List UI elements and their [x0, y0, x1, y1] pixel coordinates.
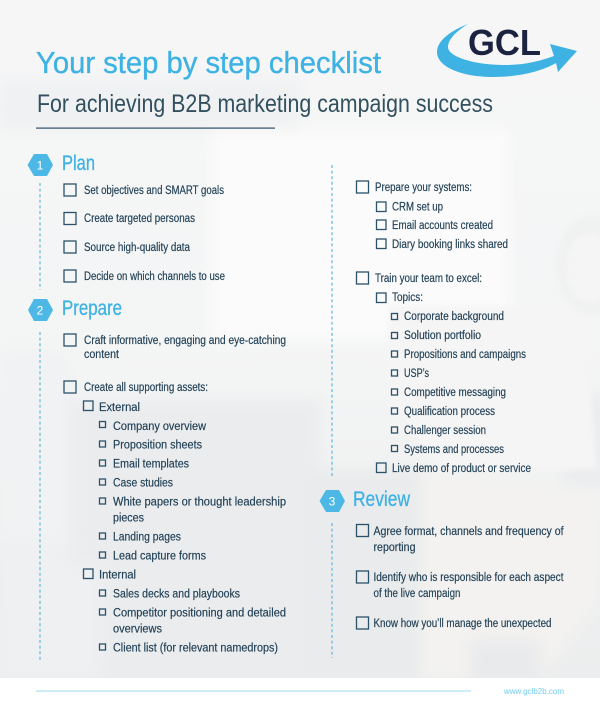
footer [0, 678, 600, 714]
heading: Review: Review [353, 488, 411, 511]
checklist: Review items: Know how you’ll manage the unexpected [374, 618, 552, 630]
checklist: systems and training: Propositions and campaigns [404, 349, 526, 361]
checklist: Prepare items: Case studies [113, 478, 173, 490]
checklist: Prepare items: pieces [113, 512, 144, 524]
heading: Prepare: Prepare [62, 297, 122, 320]
checklist: Prepare items: Proposition sheets [113, 440, 202, 452]
icon: hexagon 3 [320, 490, 345, 512]
checklist: Prepare items: Competitor positioning and detailed [113, 608, 286, 620]
footer url: www.gclb2b.com [503, 687, 564, 696]
icon: hexagon 2: 2 [37, 304, 44, 318]
checklist: Plan items: Set objectives and SMART goals [84, 185, 224, 197]
timeline: left column [39, 183, 41, 662]
heading: Plan: Plan [62, 152, 95, 175]
checklist: systems and training: Challenger session [404, 425, 486, 437]
checklist: Prepare items: content [84, 349, 120, 361]
timeline: right column [331, 165, 333, 658]
checklist: Review items: Identify who is responsible for each aspect [374, 572, 564, 584]
title: Your step by step checklist [36, 45, 381, 80]
checklist: Plan items: Source high-quality data [84, 242, 191, 254]
icon: hexagon 1 [28, 154, 53, 176]
checklist: Plan items [64, 184, 225, 283]
checklist: Plan items: Create targeted personas [84, 213, 195, 225]
section: Plan [28, 152, 225, 283]
checklist: systems and training: Prepare your systems: [375, 182, 472, 194]
icon: hexagon 1: 1 [37, 158, 44, 172]
header rule [36, 128, 275, 129]
checklist: Prepare items: Create all supporting assets: [84, 382, 208, 394]
section: Prepare [28, 297, 286, 654]
checklist: Prepare items: Client list (for relevant namedrops) [113, 642, 278, 654]
logo: GCL [437, 22, 577, 77]
checklist: systems and training: Corporate background [404, 311, 504, 323]
checklist: Review items: reporting [374, 542, 416, 554]
checklist: Prepare items: Internal [99, 570, 136, 582]
checklist: Review items: Agree format, channels and frequency of [374, 526, 564, 538]
checklist: systems and training: Diary booking links shared [392, 239, 508, 251]
checklist: systems and training: Competitive messaging [404, 387, 506, 399]
checklist: Plan items: Decide on which channels to use [84, 271, 225, 283]
logo: GCL: GCL [468, 22, 541, 63]
icon: hexagon 2 [28, 299, 53, 321]
checklist: Prepare items: overviews [113, 624, 162, 636]
checklist: Prepare items: Lead capture forms [113, 550, 206, 562]
checklist: systems and training [356, 181, 531, 475]
checklist: Prepare items [64, 334, 286, 654]
checklist: systems and training: CRM set up [392, 202, 443, 214]
checklist: Prepare items: Craft informative, engaging and eye-catching [84, 335, 286, 347]
checklist: Prepare items: White papers or thought leadership [113, 496, 286, 508]
checklist: systems and training: Email accounts created [392, 220, 493, 232]
checklist: systems and training: Live demo of product or service [392, 463, 531, 475]
section: Review [320, 488, 564, 630]
checklist: systems and training: Solution portfolio [404, 330, 481, 342]
checklist: Prepare items: Sales decks and playbooks [113, 588, 240, 600]
checklist: systems and training: Qualification process [404, 406, 495, 418]
checklist: systems and training: Topics: [392, 292, 423, 304]
checklist: Review items [356, 524, 564, 630]
checklist: Prepare items: Email templates [113, 458, 189, 470]
checklist: systems and training: Systems and processes [404, 444, 504, 456]
checklist: Prepare items: External [99, 402, 140, 414]
checklist: Prepare items: Company overview [113, 421, 207, 433]
subtitle: For achieving B2B marketing campaign success [37, 90, 493, 118]
checklist: systems and training: Train your team to excel: [375, 273, 482, 285]
checklist: Prepare items: Landing pages [113, 532, 181, 544]
icon: hexagon 3: 3 [329, 494, 336, 508]
checklist: systems and training: USP’s [404, 368, 429, 380]
checklist: Review items: of the live campaign [374, 588, 460, 600]
